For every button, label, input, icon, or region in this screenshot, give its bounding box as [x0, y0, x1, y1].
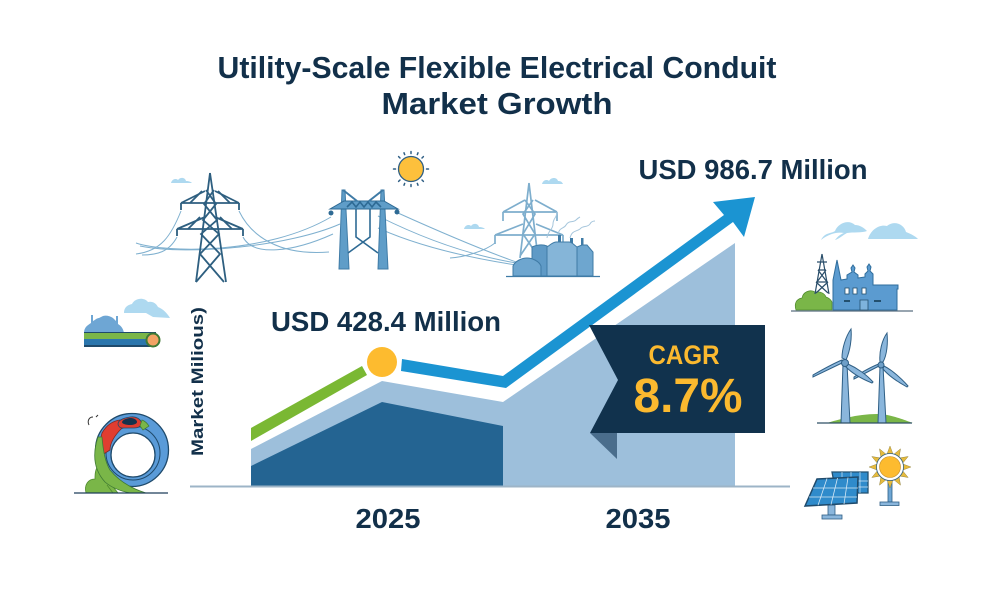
icon: factory [506, 235, 600, 276]
y axis label: Market Milious) [188, 307, 207, 456]
value: 2025: USD 428.4 Million [271, 306, 501, 337]
green growth segment [251, 366, 367, 441]
CAGR callout: CAGR [648, 340, 720, 370]
front panel [805, 477, 858, 519]
icon: wind turbines [813, 329, 913, 423]
icon: transmission tower 1 [177, 173, 243, 282]
CAGR callout: 8.7% [634, 370, 742, 423]
icon: conduit coil [74, 414, 168, 493]
dark area [251, 402, 503, 486]
power lines [136, 211, 528, 266]
light area [251, 243, 735, 486]
icon: sun top [394, 152, 428, 186]
sun on post [869, 446, 911, 506]
marker 2025 [367, 347, 397, 377]
back panel [829, 472, 868, 493]
icon: smoke [547, 212, 595, 238]
year labels: 2025 [356, 503, 420, 534]
icon: pipe with dome [84, 299, 170, 347]
chart [190, 197, 790, 486]
year labels: 2035 [606, 503, 670, 534]
title: Utility-Scale Flexible Electrical Conduit [218, 50, 776, 85]
icon: transmission tower 3 [495, 183, 563, 258]
title: Market Growth [382, 86, 612, 121]
icon: small clouds [171, 178, 563, 229]
CAGR callout [589, 325, 765, 459]
year labels [356, 503, 670, 534]
icon: transmission tower 2 [328, 190, 400, 269]
icon: solar panels with sun [805, 446, 911, 519]
value: 2035: USD 986.7 Million [638, 154, 868, 185]
icon: substation [791, 222, 918, 311]
title [218, 50, 776, 121]
blue growth arrow [401, 197, 755, 388]
axis [190, 486, 790, 488]
